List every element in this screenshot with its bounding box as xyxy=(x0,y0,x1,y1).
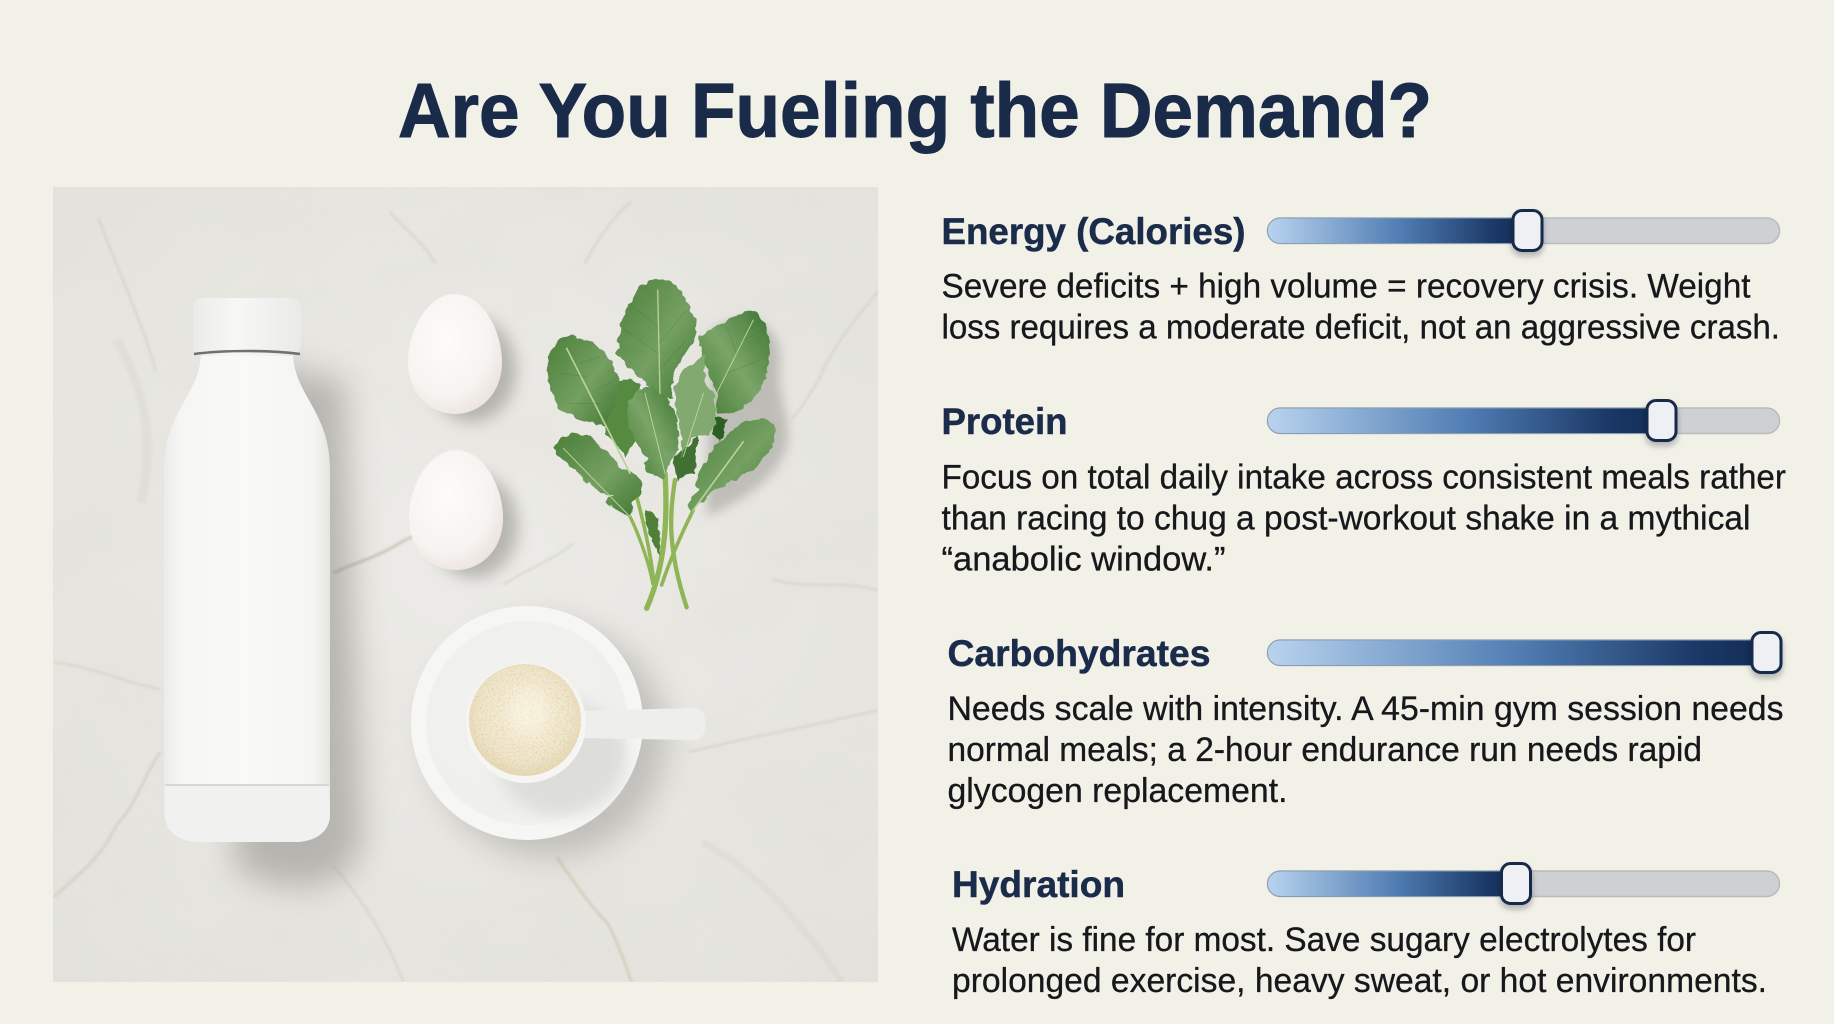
slider track xyxy=(1268,218,1780,244)
description xyxy=(942,268,1780,346)
slider thumb xyxy=(1513,210,1542,250)
description: glycogen replacement. xyxy=(948,772,1288,810)
description: Water is fine for most. Save sugary electrolytes for xyxy=(952,921,1696,959)
icon: lower egg xyxy=(409,450,503,570)
panel: Hydration xyxy=(952,864,1780,1000)
icon: plate xyxy=(411,606,643,840)
description: normal meals; a 2-hour endurance run needs rapid xyxy=(948,731,1702,769)
description xyxy=(942,458,1786,578)
description: Severe deficits + high volume = recovery crisis. Weight xyxy=(942,268,1751,306)
description: Needs scale with intensity. A 45-min gym session needs xyxy=(948,690,1784,728)
description: “anabolic window.” xyxy=(942,540,1226,578)
marble veins xyxy=(54,201,878,982)
slider track xyxy=(1268,408,1780,434)
panel: Carbohydrates xyxy=(948,632,1784,810)
heading: Energy (Calories) xyxy=(942,211,1246,252)
icon: scoop with protein powder xyxy=(466,663,706,783)
slider fill xyxy=(1268,640,1778,666)
icon: white water bottle xyxy=(164,298,330,842)
icon: arugula leaves xyxy=(548,279,788,608)
plate shadow xyxy=(430,624,666,856)
heading: Hydration xyxy=(952,864,1125,905)
slider fill xyxy=(1268,218,1538,244)
description: loss requires a moderate deficit, not an aggressive crash. xyxy=(942,308,1780,346)
heading: Protein xyxy=(942,401,1068,442)
slider fill xyxy=(1268,408,1672,434)
description xyxy=(952,921,1767,1000)
panel: Energy (Calories) xyxy=(942,210,1780,346)
slider thumb xyxy=(1752,632,1781,672)
description xyxy=(948,690,1784,810)
bottle shadow xyxy=(235,360,362,886)
panel: food photograph on marble xyxy=(53,187,878,982)
description: prolonged exercise, heavy sweat, or hot environments. xyxy=(952,962,1767,1000)
description: Focus on total daily intake across consistent meals rather xyxy=(942,458,1786,496)
slider fill xyxy=(1268,871,1528,896)
slider track xyxy=(1268,640,1780,666)
egg shadows xyxy=(428,318,518,578)
title: Are You Fueling the Demand? xyxy=(398,68,1432,154)
heading: Carbohydrates xyxy=(948,633,1210,674)
slider track xyxy=(1268,871,1780,896)
slider thumb xyxy=(1502,864,1530,904)
icon: upper egg xyxy=(408,294,502,414)
slider thumb xyxy=(1647,400,1676,440)
panel: Protein xyxy=(942,400,1786,578)
description: than racing to chug a post-workout shake in a mythical xyxy=(942,500,1750,538)
